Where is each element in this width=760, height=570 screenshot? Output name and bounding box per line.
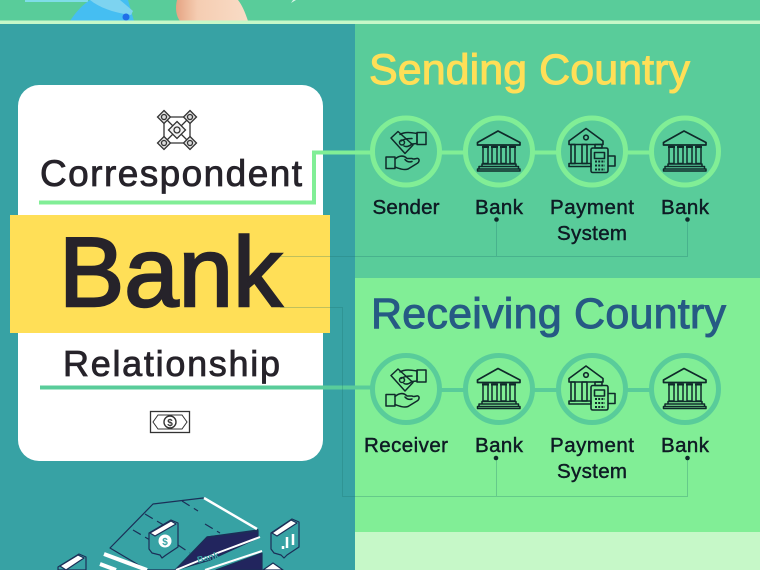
icon: dollar bubble xyxy=(149,520,178,558)
step: payment system: Payment xyxy=(550,434,634,457)
icon: chart bubble xyxy=(271,519,299,558)
top band with hands illustration xyxy=(0,0,760,24)
step: bank: Bank xyxy=(661,196,710,219)
heading: Relationship: Relationship xyxy=(63,343,280,384)
step: payment system: Payment xyxy=(550,196,634,219)
step: payment system: System xyxy=(557,460,627,483)
heading: Receiving Country: Receiving Country xyxy=(371,290,726,338)
step: bank: Bank xyxy=(475,434,524,457)
icon: bank note: $ xyxy=(167,418,173,429)
connector: relationship to receiver xyxy=(40,386,372,390)
connector: correspondent to sender xyxy=(39,152,372,202)
flow: sending country steps xyxy=(372,118,718,245)
heading: Correspondent: Correspondent xyxy=(40,153,303,194)
banner: yellow Bank: Bank xyxy=(59,217,283,327)
step: sender: Sender xyxy=(372,196,440,219)
connector: receiving network lines xyxy=(280,308,690,496)
step: payment system xyxy=(550,118,634,245)
step: bank xyxy=(652,356,718,457)
icon: dollar bubble: $ xyxy=(162,537,168,548)
step: sender xyxy=(372,118,440,219)
step: bank xyxy=(466,356,532,457)
illustration: isometric bank building xyxy=(58,498,299,570)
panel: bottom light strip xyxy=(355,532,760,570)
flow: receiving country steps xyxy=(364,356,718,483)
step: payment system xyxy=(550,356,634,483)
panel: left teal background xyxy=(0,24,355,570)
step: receiver: Receiver xyxy=(364,434,448,457)
step: bank xyxy=(652,118,718,219)
icon: small bubble left xyxy=(58,554,86,570)
panel: receiving country background xyxy=(355,278,760,532)
step: bank: Bank xyxy=(661,434,710,457)
panel: sending country background xyxy=(355,24,760,278)
heading: Sending Country: Sending Country xyxy=(369,46,690,94)
step: payment system: System xyxy=(557,222,627,245)
step: bank: Bank xyxy=(475,196,524,219)
icon: small bubble right xyxy=(263,563,283,570)
illustration: isometric bank building: Bank xyxy=(196,550,221,565)
connector: sending network lines xyxy=(280,217,690,256)
panel: white title card xyxy=(18,85,323,461)
step: bank xyxy=(466,118,532,219)
icon: bank note xyxy=(150,412,190,432)
step: receiver xyxy=(364,356,448,457)
icon: network of banks xyxy=(158,110,196,150)
banner: yellow Bank xyxy=(10,215,330,333)
